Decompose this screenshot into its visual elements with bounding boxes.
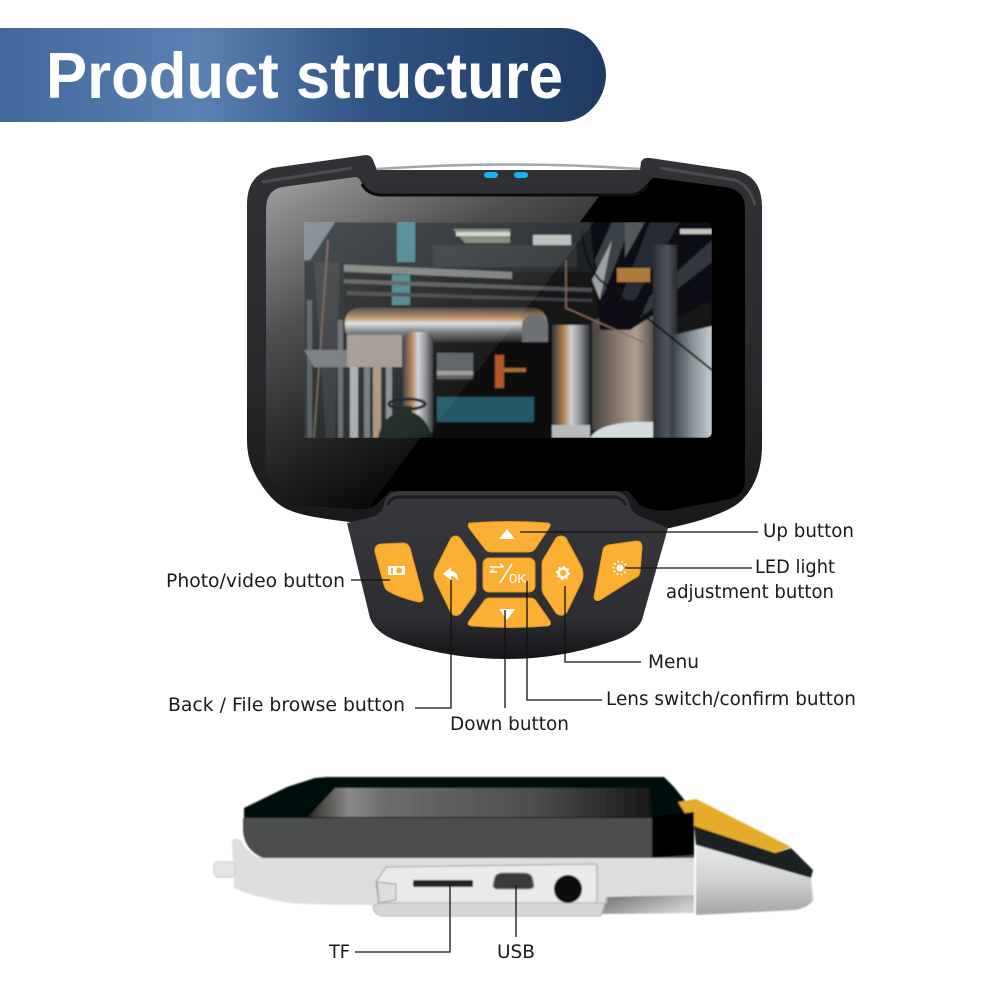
indicator lights (484, 172, 528, 178)
label: back: Back / File browse button (168, 694, 405, 716)
keypad recess (388, 497, 626, 505)
icon: gear (557, 567, 569, 579)
back button (434, 536, 476, 616)
audio jack (554, 875, 582, 903)
centre lens switch / OK button (483, 558, 535, 592)
top bar shadow edge (362, 184, 648, 195)
side: latch (377, 882, 396, 903)
screen (266, 177, 745, 510)
label: photo/video: Photo/video button (166, 570, 345, 592)
side: panel lower lip (373, 897, 607, 916)
side: black corner (652, 812, 694, 858)
title banner (0, 28, 606, 122)
label: menu: Menu (648, 651, 699, 673)
side: screen glass (244, 777, 694, 825)
USB port (493, 873, 534, 889)
up button (468, 522, 550, 552)
leader lines (351, 532, 758, 952)
label: up button: Up button (763, 520, 854, 542)
reflection over photo (304, 222, 594, 438)
side: underside shadow (600, 895, 694, 914)
side: white shell (232, 838, 694, 914)
side: metal body band (243, 812, 694, 858)
icon: down triangle (499, 609, 515, 620)
menu button (542, 536, 583, 615)
icon: back arrow (443, 567, 458, 581)
button icons (388, 529, 626, 620)
inspection photo (304, 222, 712, 438)
labels (166, 520, 856, 963)
icon: camera (388, 566, 405, 575)
side: hinge peg (214, 862, 235, 877)
keypad housing (347, 491, 668, 659)
side: yellow buttons (678, 799, 791, 853)
top bezel highlight (377, 164, 640, 169)
down button (468, 598, 550, 628)
side view of device (214, 777, 813, 916)
side: wedge shell (696, 845, 813, 915)
label: adjustment button: adjustment button (666, 581, 834, 603)
label: USB: USB (497, 941, 535, 963)
icon: sun (614, 562, 626, 574)
front view of device (247, 155, 762, 659)
icon: up triangle (499, 529, 515, 539)
icon: switch arrows / OK: 0K (509, 571, 527, 586)
label: LED light: LED light (755, 556, 835, 578)
label: down: Down button (450, 713, 569, 735)
LED button (594, 541, 642, 601)
device body (247, 155, 762, 530)
bezel lip highlight (262, 168, 755, 205)
label: lens switch: Lens switch/confirm button (606, 688, 856, 710)
side: keypad black edge (694, 826, 813, 878)
icon: switch arrows / OK (490, 564, 527, 586)
side: port panel (376, 864, 597, 903)
buttons (375, 522, 642, 628)
label: TF: TF (328, 941, 350, 963)
title: Product structure (46, 39, 563, 112)
screen reflection (266, 177, 600, 509)
photo/video button (375, 543, 423, 602)
TF slot (413, 880, 473, 887)
